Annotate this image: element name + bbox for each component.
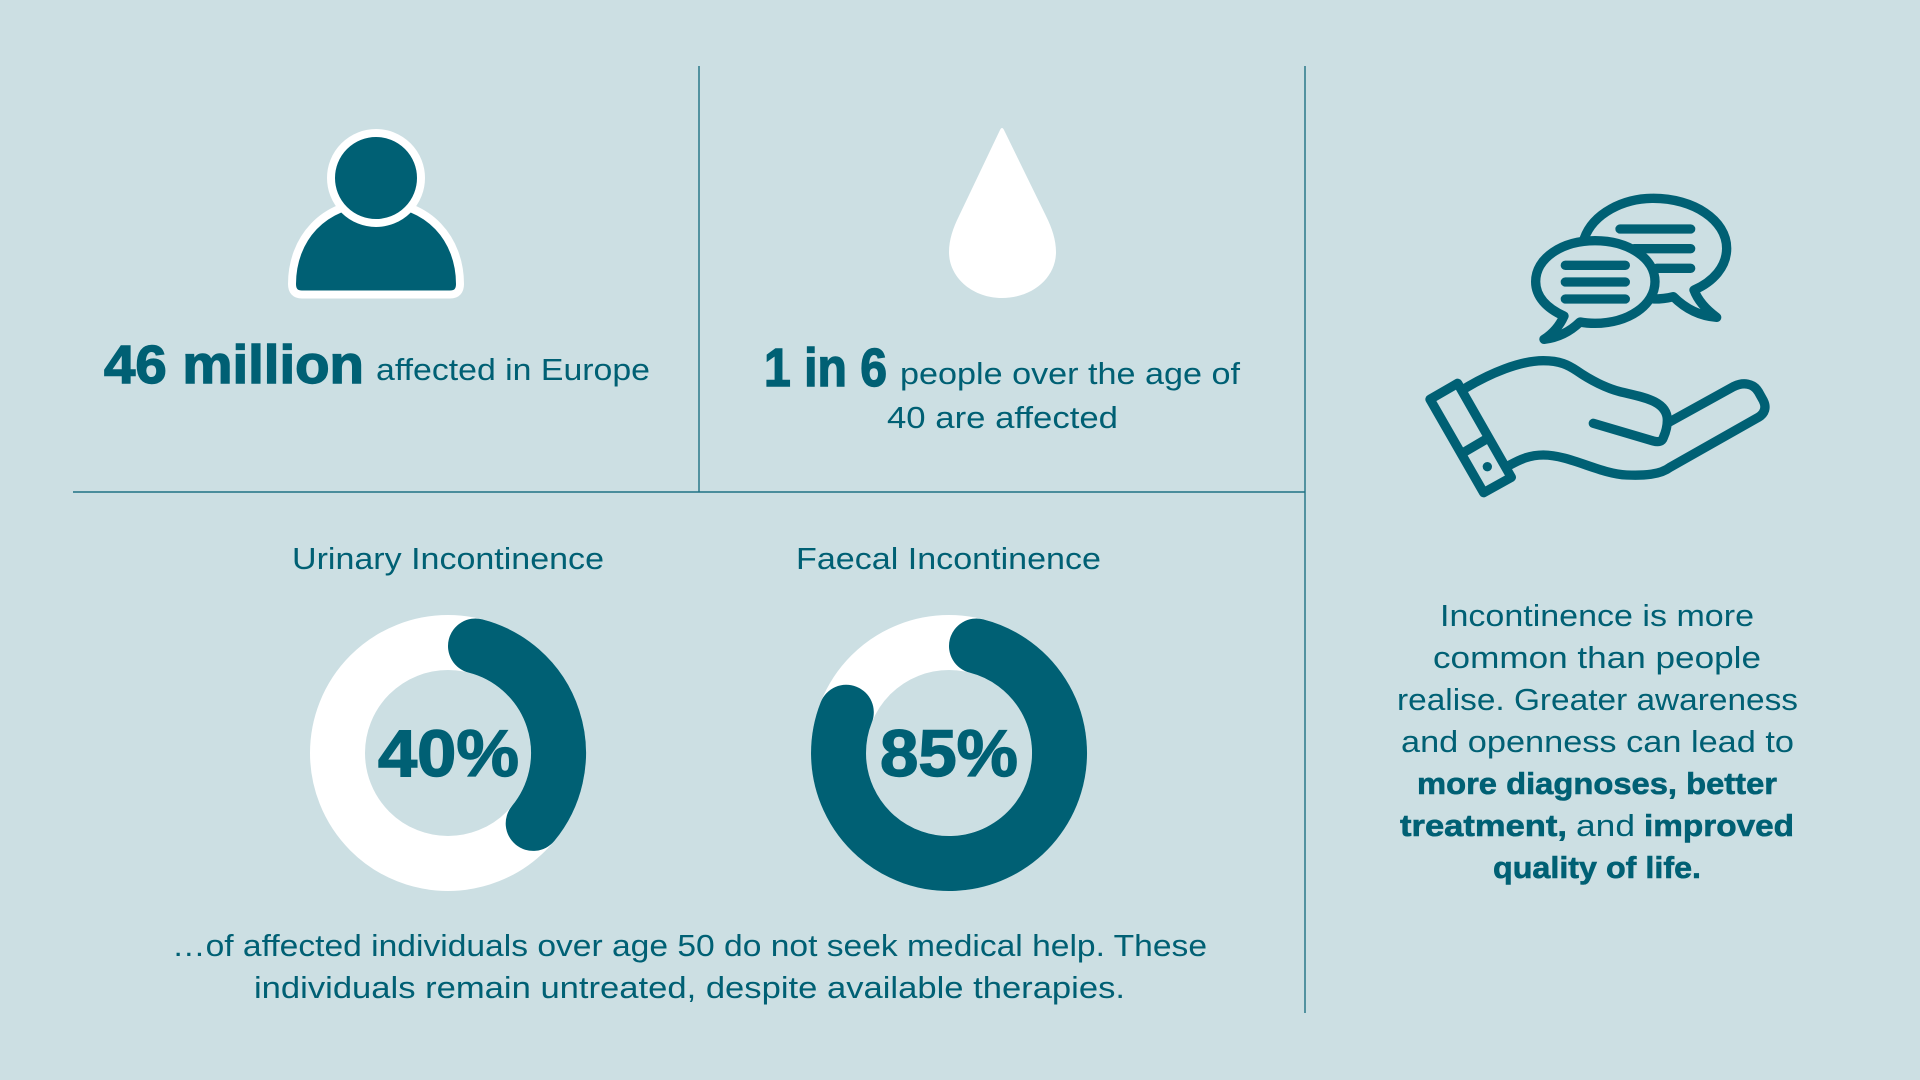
panel: 1 in 6 affected — [764, 128, 1240, 435]
text block: untreated individuals — [172, 928, 1207, 1005]
icon: person — [292, 133, 460, 294]
icon part: hand — [1465, 361, 1765, 475]
icon part: front speech bubble — [1536, 241, 1655, 339]
donut chart: 40%: 40% — [378, 716, 519, 790]
icon: water drop — [949, 128, 1056, 298]
icon: hand holding speech bubbles — [1430, 198, 1765, 493]
stat: 46 million: 46 million — [104, 335, 364, 395]
label: affected in Europe: affected in Europe — [376, 352, 650, 387]
text block: untreated individuals: individuals remain untreated, despite available therapies. — [254, 970, 1125, 1005]
icon part: back speech bubble — [1584, 198, 1727, 317]
text block: awareness message: improved — [1644, 808, 1794, 843]
text block: awareness message: and — [1576, 808, 1635, 843]
text block: untreated individuals: …of affected individuals over age 50 do not seek medical help. These — [172, 928, 1207, 963]
text block: awareness message: Incontinence is more — [1440, 598, 1754, 633]
donut chart: 85% — [838, 642, 1060, 864]
text block: awareness message: quality of life. — [1493, 850, 1701, 885]
heading: urinary incontinence: Urinary Incontinence — [292, 541, 604, 576]
donut chart: 40% — [338, 642, 559, 864]
text block: awareness message — [1397, 598, 1798, 885]
text block: awareness message: and openness can lead to — [1401, 724, 1794, 759]
text block: awareness message: treatment, — [1400, 808, 1567, 843]
panel: faecal incontinence — [796, 541, 1101, 864]
label: people over the age of: people over the age of — [900, 356, 1240, 391]
text block: awareness message: realise. Greater awareness — [1397, 682, 1798, 717]
heading: faecal incontinence: Faecal Incontinence — [796, 541, 1101, 576]
text block: awareness message: more diagnoses, better — [1417, 766, 1777, 801]
panel: 46 million affected — [104, 133, 650, 395]
panel: urinary incontinence — [292, 541, 604, 864]
stat: 1 in 6: 1 in 6 — [764, 338, 887, 398]
icon part: cuff — [1430, 383, 1511, 493]
label: 40 are affected: 40 are affected — [887, 400, 1118, 435]
text block: awareness message: common than people — [1433, 640, 1761, 675]
donut chart: 85%: 85% — [880, 716, 1018, 790]
